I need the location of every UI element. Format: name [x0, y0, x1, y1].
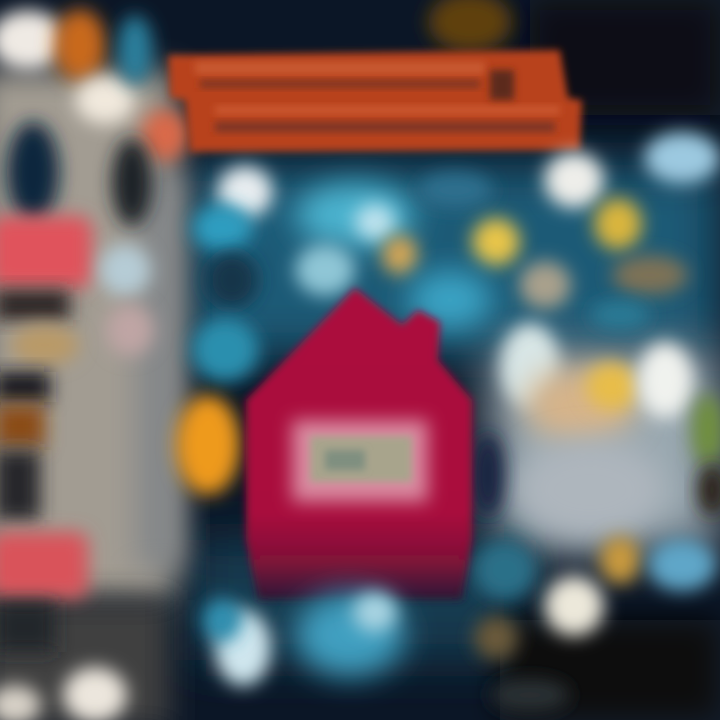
icon: orange block — [176, 395, 240, 495]
house window — [292, 420, 428, 502]
panel: bottom blue icons — [202, 592, 570, 711]
panel: left castle column — [0, 9, 189, 720]
panel: right pale cluster — [472, 323, 720, 660]
icon: red house — [246, 288, 472, 600]
heading: orange title banner — [168, 0, 582, 152]
panel: teal icons and lights — [191, 132, 720, 382]
